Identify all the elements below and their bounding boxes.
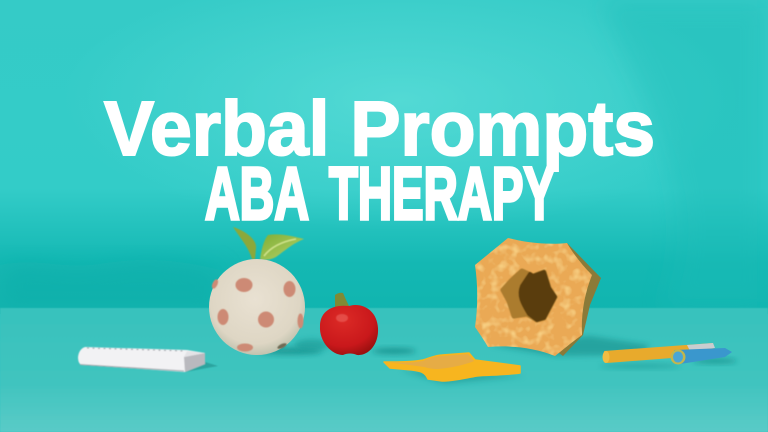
icon: flat orange star piece xyxy=(384,353,525,384)
leaves xyxy=(233,227,304,260)
icon: orange foam block with star hole xyxy=(475,238,650,356)
icon: yellow marker and blue pen xyxy=(600,343,737,368)
icon: white ruler block xyxy=(78,347,218,372)
subtitle: ABA THERAPY: ABA xyxy=(205,152,309,235)
dots xyxy=(211,278,304,352)
icon: polka dot ball with leaves xyxy=(209,227,330,355)
star hole xyxy=(503,271,555,320)
background: teal wall xyxy=(0,0,768,314)
subtitle: ABA THERAPY xyxy=(205,152,555,235)
background: teal floor xyxy=(0,308,768,432)
subtitle: ABA THERAPY: THERAPY xyxy=(329,152,555,235)
icon: red apple xyxy=(320,293,416,355)
title: Verbal Prompts: Verbal Prompts xyxy=(104,86,655,172)
